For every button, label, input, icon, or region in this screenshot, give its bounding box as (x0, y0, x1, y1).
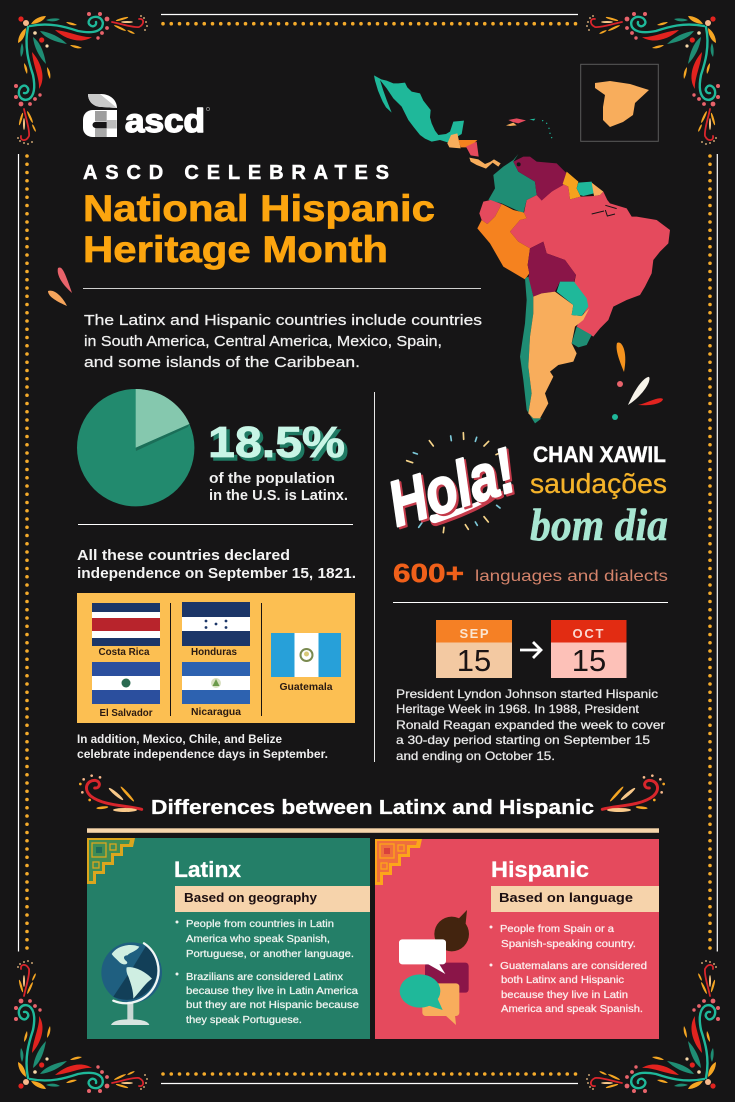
bullet list: Spanish-speaking country. (501, 939, 636, 950)
bullet list: because they live in Latin (501, 990, 628, 1001)
inset: Spain (581, 64, 658, 141)
map: Brazil (510, 184, 670, 337)
bullet list: Guatemalans are considered (500, 961, 647, 972)
corner pattern (87, 838, 135, 884)
panel: Latinx (87, 838, 370, 1039)
sunburst rays (407, 433, 501, 533)
title line: national hispanic: National Hispanic (83, 188, 435, 229)
title line: ascd celebrates: ASCD CELEBRATES (83, 162, 389, 184)
note: September independence days (77, 734, 328, 761)
map: French Guiana (592, 183, 603, 196)
flag: Honduras (182, 602, 250, 658)
calendar: October 15 (551, 620, 626, 678)
map: Argentina (528, 292, 589, 418)
note: September independence days: In addition, Mexico, Chile, and Belize (77, 734, 282, 746)
map: Ecuador (479, 200, 502, 224)
map: Venezuela (513, 157, 567, 201)
corner pattern (375, 839, 422, 885)
decorative petals left (48, 268, 72, 306)
ornament: heading right (602, 774, 665, 812)
calendar: September 15 (436, 620, 512, 678)
lettering: Hola!: Hola! (380, 434, 523, 540)
statistic: 600+ languages: languages and dialects (475, 568, 668, 585)
corner ornament: top left (14, 12, 148, 145)
right border (710, 154, 717, 952)
statistic caption: of the population (209, 471, 335, 487)
flag: Guatemala: Guatemala (280, 682, 333, 693)
calendar: September 15: 15 (457, 643, 491, 678)
map: Peru (477, 204, 530, 279)
panel: flags (77, 593, 355, 723)
flag: Costa Rica (92, 603, 160, 658)
logo: ascd: ascd (125, 102, 205, 139)
bullet list: America who speak Spanish, (186, 934, 330, 945)
corner ornament: bottom left (14, 960, 148, 1093)
bullet list: Portuguese, or another language. (186, 949, 354, 960)
flag: Guatemala (271, 633, 341, 693)
icon: globe (101, 942, 162, 1025)
decorative petals right (612, 343, 663, 420)
map: Mexico (374, 75, 464, 143)
panel heading: Hispanic (491, 857, 589, 882)
map: Costa Rica and Panama (469, 158, 501, 169)
map: Guyana (563, 172, 581, 199)
bullet list: People from Spain or a (500, 924, 614, 935)
flag: Honduras: Honduras (191, 647, 237, 658)
paragraph: history of the month: and ending on October 15. (396, 749, 555, 763)
label bar: based on language (491, 886, 659, 912)
bottom border (161, 1074, 578, 1084)
statistic: 18.5%: 18.5% (211, 421, 348, 470)
paragraph: history of the month (396, 687, 665, 763)
corner ornament: top right (586, 12, 720, 145)
bullet list: because they live in Latin America (186, 986, 358, 997)
note: September independence days: celebrate independence days in September. (77, 749, 328, 761)
label bar: based on language: Based on language (499, 890, 633, 905)
flag: El Salvador: El Salvador (100, 708, 153, 719)
paragraph: history of the month: President Lyndon Johnson started Hispanic (396, 687, 658, 701)
bullet list: America and speak Spanish. (501, 1004, 643, 1015)
flag: El Salvador (92, 662, 160, 719)
arrow (520, 642, 541, 658)
calendar: September 15: SEP (460, 626, 489, 641)
statistic caption: in the U.S. is Latinx. (209, 488, 348, 504)
top border (161, 14, 578, 24)
intro paragraph: The Latinx and Hispanic countries include countries (84, 312, 482, 329)
panel: Hispanic (375, 839, 659, 1039)
greeting: bom dia: bom dia (530, 499, 668, 550)
heading: differences: Differences between Latinx and Hispanic (151, 797, 594, 819)
corner ornament: bottom right (586, 960, 720, 1093)
statistic caption (209, 471, 348, 504)
bullet list (490, 924, 647, 1015)
logo: ascd (83, 94, 210, 139)
statistic: 600+ languages: 600+ (393, 558, 464, 588)
map: Honduras (458, 140, 477, 147)
greeting: Chan Xawil: CHAN XAWIL (533, 442, 666, 467)
swoosh (431, 495, 498, 526)
pie chart: 18.5 percent (77, 389, 194, 506)
statistic: 18.5%: 18.5% (208, 418, 345, 467)
flag: Nicaragua (182, 662, 250, 718)
heading: independence (77, 547, 356, 582)
map: Uruguay (572, 327, 592, 347)
map: Nicaragua (466, 142, 479, 157)
title (83, 162, 435, 270)
paragraph: history of the month: Heritage Week in 1968. In 1988, President (396, 702, 640, 716)
intro paragraph: in South America, Central America, Mexico, Spain, (84, 333, 442, 350)
label bar: based on geography (175, 886, 370, 912)
map: Colombia (488, 154, 537, 213)
lettering: Hola!: Hola! (382, 436, 525, 542)
bullet list (176, 919, 359, 1026)
label bar: based on geography: Based on geography (184, 890, 318, 905)
greeting: saudações: saudações (530, 468, 667, 499)
heading: independence: All these countries declared (77, 547, 290, 564)
map: Suriname (577, 182, 594, 196)
title line: heritage month: Heritage Month (83, 229, 388, 270)
statistic: 600+ languages (393, 558, 668, 588)
map: Caribbean islands (506, 118, 552, 138)
flag: Nicaragua: Nicaragua (191, 707, 241, 718)
map of Latin America (374, 75, 670, 423)
calendar: October 15: OCT (572, 626, 604, 641)
left border (18, 154, 27, 952)
bullet list: both Latinx and Hispanic (501, 975, 624, 986)
icon: speech bubbles (399, 910, 469, 1025)
heading: independence: independence on September 15, 1821. (77, 565, 356, 582)
ornament: heading left (79, 774, 142, 812)
paragraph: history of the month: a 30-day period starting on September 15 (396, 733, 650, 747)
intro paragraph: and some islands of the Caribbean. (84, 354, 360, 371)
map: Bolivia (528, 242, 576, 297)
map: Guatemala and Belize (447, 133, 461, 148)
bullet list: Brazilians are considered Latinx (186, 972, 343, 983)
map: Chile (520, 277, 542, 423)
map: Paraguay (557, 282, 588, 316)
bullet list: People from countries in Latin (186, 919, 334, 930)
bullet list: but they are not Hispanic because (186, 1000, 359, 1011)
intro paragraph (84, 312, 482, 371)
calendar: October 15: 15 (572, 643, 606, 678)
flag: Costa Rica: Costa Rica (98, 647, 150, 658)
paragraph: history of the month: Ronald Reagan expanded the week to cover (396, 718, 665, 732)
panel heading: Latinx (174, 857, 242, 882)
bullet list: they speak Portuguese. (186, 1015, 302, 1026)
